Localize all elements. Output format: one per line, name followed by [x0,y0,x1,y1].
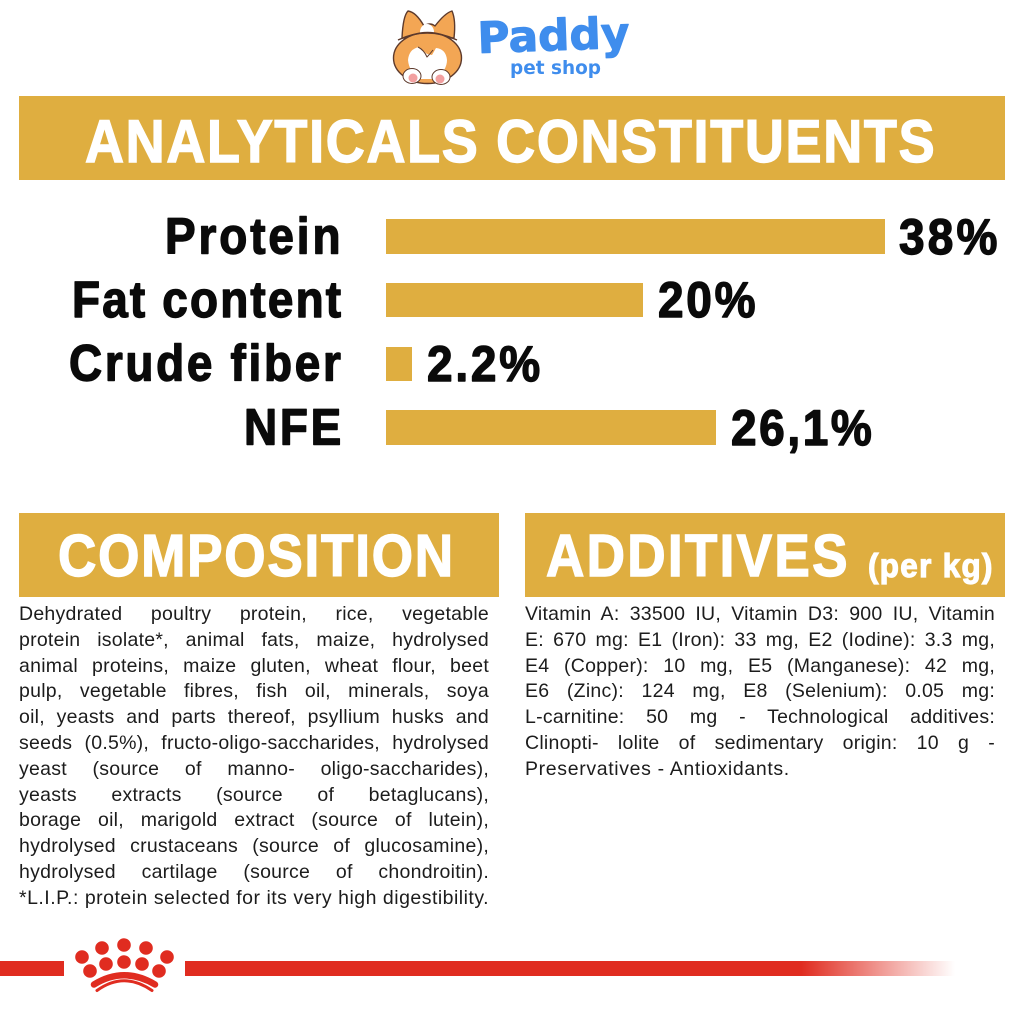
text block: composition: animal proteins, maize gluten, wheat flour, beet [19,655,489,677]
icon: crown [75,938,174,990]
text block: additives [525,603,995,780]
heading: additives: (per kg) [868,547,992,584]
logo: Paddy pet shop [394,9,630,85]
text block: additives: E4 (Copper): 10 mg, E5 (Manganese): 42 mg, [525,655,995,677]
row: fat content: Fat content [72,272,341,329]
text block: composition: borage oil, marigold extract (source of lutein), [19,809,489,831]
row: NFE [244,399,872,456]
heading: additives [525,513,1005,597]
text block: composition: pulp, vegetable fibres, fish oil, minerals, soya [19,680,489,702]
row: NFE: NFE [244,399,341,456]
title banner [19,96,1005,180]
row: protein: Protein [165,208,341,265]
icon: corgi [394,11,462,84]
row: fat content [72,272,756,329]
footer: red stripe with crown logo [0,938,955,990]
text block: composition: protein isolate*, animal fats, maize, hydrolysed [19,629,489,651]
row: protein [165,208,997,265]
text block: additives: L-carnitine: 50 mg - Technological additives: [525,706,995,728]
row: fat content: 20% [658,273,756,328]
text block: composition: hydrolysed cartilage (source of chondroitin). [19,861,489,883]
text block: composition: hydrolysed crustaceans (source of glucosamine), [19,835,489,857]
row: crude fiber [69,335,540,392]
text block: additives: Clinopti- lolite of sedimentary origin: 10 g - [525,732,995,754]
logo tagline: pet shop [510,57,601,79]
bar chart: constituents [69,208,997,456]
text block: additives: E6 (Zinc): 124 mg, E8 (Selenium): 0.05 mg: [525,680,995,702]
text block: composition: yeast (source of manno- oligo-saccharides), [19,758,489,780]
text block: composition: *L.I.P.: protein selected for its very high digestibility. [19,887,489,909]
row: crude fiber: 2.2% [427,337,540,392]
text block: composition: oil, yeasts and parts thereof, psyllium husks and [19,706,489,728]
heading: additives: ADDITIVES [546,522,848,589]
heading: composition: COMPOSITION [58,522,453,589]
text block: composition [19,603,489,909]
text block: additives: Vitamin A: 33500 IU, Vitamin D3: 900 IU, Vitamin [525,603,995,625]
title: ANALYTICALS CONSTITUENTS [85,108,935,176]
heading: composition [19,513,499,597]
logo wordmark: Paddy [477,9,630,64]
text block: composition: Dehydrated poultry protein, rice, vegetable [19,603,489,625]
row: protein: 38% [899,210,997,265]
text block: additives: Preservatives - Antioxidants. [525,758,790,780]
text block: additives: E: 670 mg: E1 (Iron): 33 mg, E2 (Iodine): 3.3 mg, [525,629,995,651]
row: crude fiber: Crude fiber [69,335,341,392]
row: NFE: 26,1% [731,401,872,456]
text block: composition: yeasts extracts (source of betaglucans), [19,784,489,806]
text block: composition: seeds (0.5%), fructo-oligo-saccharides, hydrolysed [19,732,489,754]
